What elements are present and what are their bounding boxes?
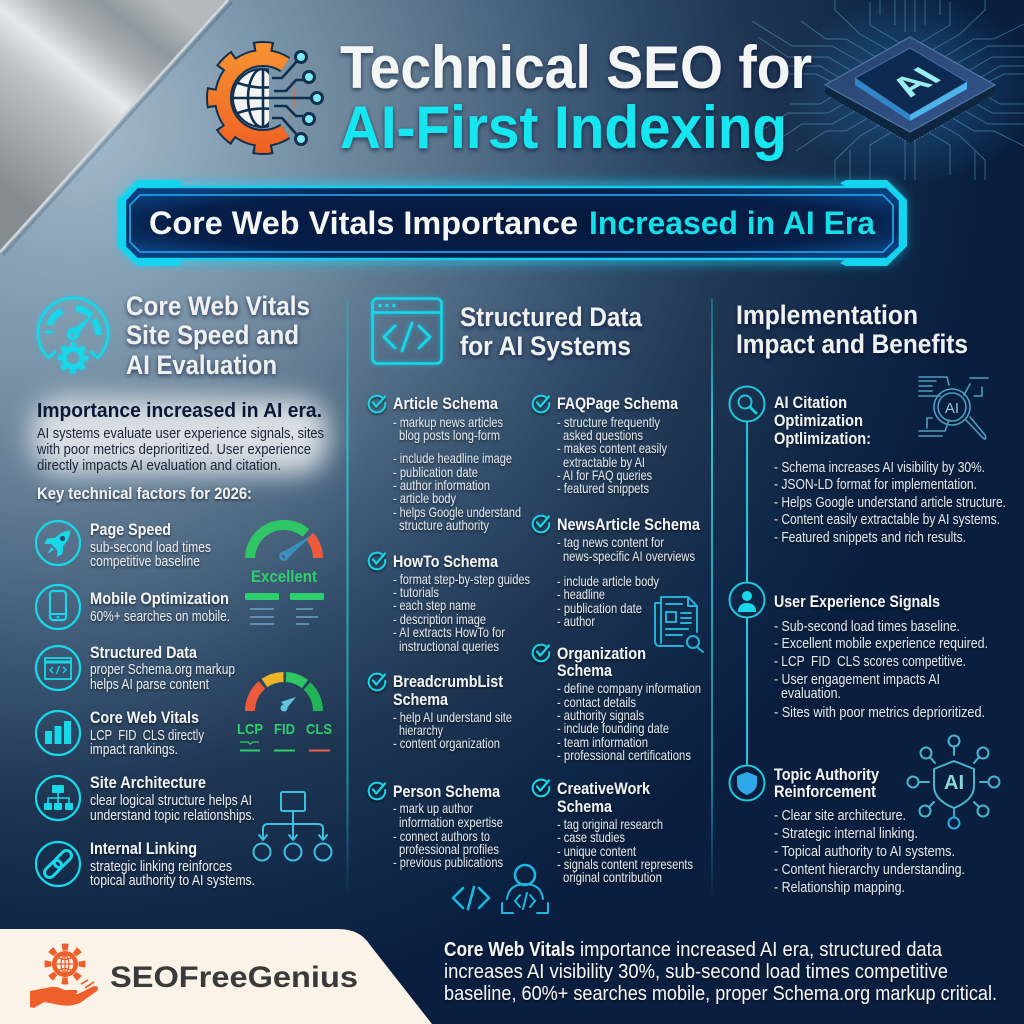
schema: organization: Organization: [557, 644, 646, 663]
panel: core web vitals: [32, 291, 332, 889]
schema: faqpage: FAQPage Schema: [557, 394, 678, 413]
AI chip illustration: [752, 0, 1024, 185]
schema: howto: - description image: [393, 611, 486, 627]
banner: Increased in AI Era: [589, 205, 875, 241]
schema: faqpage: - AI for FAQ queries: [557, 467, 652, 483]
footer: summary text: importance increased AI era, structured data: [580, 939, 943, 961]
footer: summary text: Core Web Vitals: [444, 939, 575, 961]
factor: core web vitals: Core Web Vitals: [90, 708, 199, 727]
schema: faqpage: - makes content easily: [557, 440, 667, 456]
schema: faqpage: asked questions: [563, 427, 643, 443]
benefit: user experience: - User engagement impacts AI: [774, 671, 940, 688]
panel: implementation: [730, 300, 1006, 896]
schema: person: - mark up author: [393, 800, 473, 816]
heading: implementation: Impact and Benefits: [736, 329, 968, 359]
factor: page speed: sub-second load times: [90, 540, 211, 556]
schema: breadcrumblist: [369, 672, 512, 751]
schema: howto: - each step name: [393, 597, 476, 613]
benefit: user experience: [774, 592, 988, 721]
benefit: ai citation: - JSON-LD format for implementation.: [774, 476, 977, 493]
chart: excellent gauge: [245, 525, 324, 624]
schema: article: - include headline image: [393, 450, 512, 466]
schema: newsarticle: news-specific AI overviews: [563, 548, 695, 564]
icon: browser code window: [372, 298, 442, 364]
factor: mobile optimization: Mobile Optimization: [90, 589, 229, 608]
icon: speedometer with gear: [38, 298, 108, 371]
icon: search: [730, 386, 764, 422]
benefit: user experience: - LCP FID CLS scores competitive.: [774, 653, 966, 670]
schema: newsarticle: - author: [557, 613, 595, 629]
schema: organization: - authority signals: [557, 707, 644, 723]
schema: howto: instructional queries: [399, 638, 499, 654]
factor: internal linking: Internal Linking: [90, 839, 197, 858]
icon: shield: [730, 766, 764, 800]
schema: person: - previous publications: [393, 854, 503, 870]
schema: howto: HowTo Schema: [393, 552, 498, 571]
icon: gear on hand logo: [30, 947, 98, 1008]
factor: structured data: proper Schema.org markup: [90, 662, 235, 678]
heading: structured data: Structured Data: [460, 302, 643, 332]
schema: person: Person Schema: [393, 782, 500, 801]
title: [340, 34, 812, 161]
title: Technical SEO for: [340, 34, 812, 101]
heading: implementation: [736, 300, 968, 359]
icon: ai magnifier: AI: [945, 400, 959, 417]
schema: organization: - professional certifications: [557, 747, 691, 763]
factor: structured data: [36, 643, 235, 693]
heading: structured data: for AI Systems: [460, 331, 631, 361]
footer: brand: [0, 929, 432, 1024]
footer: brand: SEOFreeGenius: [110, 961, 358, 994]
banner: Core Web Vitals Importance: [149, 205, 578, 241]
benefit: topic authority: [774, 765, 965, 896]
schema: howto: - format step-by-step guides: [393, 571, 530, 587]
chart: lcp fid cls gauge: FID: [274, 721, 295, 738]
schema: breadcrumblist: BreadcrumbList: [393, 672, 503, 691]
schema: organization: - contact details: [557, 694, 636, 710]
schema: howto: [369, 552, 530, 654]
schema: newsarticle: [533, 515, 700, 629]
factor: mobile optimization: 60%+ searches on mobile.: [90, 609, 230, 625]
schema: person: professional profiles: [399, 841, 499, 857]
callout: importance: with poor metrics deprioritized. User experience: [36, 442, 311, 458]
icon: ai magnifier: [919, 377, 988, 439]
schema: article: structure authority: [399, 517, 489, 533]
benefit: ai citation: - Featured snippets and rich results.: [774, 529, 966, 546]
schema: person: - connect authors to: [393, 828, 490, 844]
schema: creativework: Schema: [557, 797, 612, 816]
silver corner: [0, 0, 232, 255]
benefit: user experience: evaluation.: [781, 685, 841, 702]
benefit: ai citation: AI Citation: [774, 393, 847, 412]
schema: newsarticle: - headline: [557, 586, 605, 602]
icon: ai shield network: [908, 736, 1000, 828]
schema: howto: - tutorials: [393, 584, 439, 600]
schema: article: [369, 394, 521, 533]
schema: creativework: - unique content: [557, 843, 636, 859]
heading: core web vitals: [126, 291, 310, 380]
benefit: user experience: - Sub-second load times baseline.: [774, 618, 960, 635]
schema: creativework: [533, 779, 693, 885]
schema: article: blog posts long-form: [399, 427, 500, 443]
heading: core web vitals: Site Speed and: [126, 320, 299, 350]
schema: creativework: CreativeWork: [557, 779, 650, 798]
heading: implementation: Implementation: [736, 300, 918, 330]
factor: site architecture: [36, 773, 255, 824]
icon: user: [730, 582, 764, 618]
schema: organization: - team information: [557, 734, 648, 750]
benefit: topic authority: - Content hierarchy understanding.: [774, 861, 965, 878]
benefit: topic authority: - Clear site architecture.: [774, 807, 906, 824]
footer: summary text: increases AI visibility 30%, sub-second load times competitive: [444, 961, 948, 983]
schema: article: - helps Google understand: [393, 504, 521, 520]
benefit: ai citation: [774, 393, 1006, 546]
callout: importance: AI systems evaluate user experience signals, sites: [37, 426, 324, 442]
schema: breadcrumblist: - content organization: [393, 735, 500, 751]
benefit: user experience: - Sites with poor metrics deprioritized.: [774, 704, 985, 721]
factor: core web vitals: impact rankings.: [90, 742, 178, 758]
callout: importance: Importance increased in AI era.: [37, 400, 322, 422]
chart: excellent gauge: Excellent: [251, 567, 317, 586]
chart: lcp fid cls gauge: CLS: [306, 721, 332, 738]
heading: structured data: [460, 302, 643, 361]
icon: gear and globe logo: [213, 48, 322, 148]
schema: creativework: - signals content represents: [557, 856, 693, 872]
callout: importance: directly impacts AI evaluation and citation.: [37, 458, 281, 474]
schema: creativework: - case studies: [557, 829, 625, 845]
divider: [346, 298, 348, 898]
factor: internal linking: strategic linking reinforces: [90, 859, 232, 875]
factor: internal linking: topical authority to AI systems.: [90, 873, 255, 889]
schema: creativework: original contribution: [563, 869, 662, 885]
schema: article: - markup news articles: [393, 414, 503, 430]
schema: faqpage: [533, 394, 678, 496]
schema: newsarticle: - include article body: [557, 573, 659, 589]
benefit: topic authority: Reinforcement: [774, 782, 876, 801]
heading: core web vitals: AI Evaluation: [126, 350, 277, 380]
schema: article: - author information: [393, 477, 490, 493]
factor: structured data: Structured Data: [90, 643, 197, 662]
schema: article: - article body: [393, 490, 456, 506]
banner: [117, 180, 907, 266]
benefit: topic authority: - Strategic internal linking.: [774, 825, 918, 842]
schema: organization: Schema: [557, 661, 612, 680]
factor: page speed: Page Speed: [90, 520, 171, 539]
schema: creativework: - tag original research: [557, 816, 663, 832]
schema: person: [369, 782, 503, 870]
schema: breadcrumblist: - help AI understand site: [393, 709, 512, 725]
callout: importance: [32, 398, 328, 474]
factor: mobile optimization: [36, 585, 230, 629]
title: AI-First Indexing: [340, 94, 787, 161]
benefit: ai citation: Optlimization:: [774, 429, 871, 448]
heading: core web vitals: Core Web Vitals: [126, 291, 310, 321]
factor: site architecture: understand topic relationships.: [90, 808, 255, 824]
benefit: ai citation: Optimization: [774, 411, 863, 430]
schema: newsarticle: - publication date: [557, 600, 642, 616]
schema: newsarticle: - tag news content for: [557, 534, 664, 550]
benefit: topic authority: Topic Authority: [774, 765, 879, 784]
subheading: key factors: Key technical factors for 2026:: [37, 484, 252, 503]
footer: summary text: [444, 939, 997, 1005]
schema: newsarticle: NewsArticle Schema: [557, 515, 700, 534]
benefit: user experience: User Experience Signals: [774, 592, 940, 611]
factor: internal linking: [36, 839, 255, 889]
schema: person: information expertise: [399, 814, 503, 830]
factor: core web vitals: LCP FID CLS directly: [90, 728, 205, 744]
schema: breadcrumblist: Schema: [393, 690, 448, 709]
schema: organization: - define company information: [557, 680, 701, 696]
chart: lcp fid cls gauge: LCP: [237, 721, 263, 738]
benefit: topic authority: - Topical authority to AI systems.: [774, 843, 955, 860]
icon: ai shield network: AI: [944, 772, 964, 794]
chart: lcp fid cls gauge: [237, 677, 332, 750]
benefit: topic authority: - Relationship mapping.: [774, 879, 905, 896]
panel: structured data: [369, 298, 703, 913]
schema: article: - publication date: [393, 464, 478, 480]
schema: faqpage: - structure frequently: [557, 414, 660, 430]
factor: page speed: [36, 520, 211, 570]
factor: structured data: helps AI parse content: [90, 677, 209, 693]
schema: organization: [533, 644, 701, 763]
factor: site architecture: Site Architecture: [90, 773, 206, 792]
schema: faqpage: - featured snippets: [557, 480, 649, 496]
diagram: site hierarchy: [254, 792, 332, 860]
factor: core web vitals: [36, 708, 205, 758]
AI chip illustration: AI: [881, 62, 951, 102]
factor: site architecture: clear logical structure helps AI: [90, 793, 252, 809]
schema: howto: - AI extracts HowTo for: [393, 624, 505, 640]
schema: breadcrumblist: hierarchy: [399, 722, 443, 738]
schema: organization: - include founding date: [557, 720, 669, 736]
icon: code and person: [453, 865, 548, 913]
icon: newspaper with magnifier: [655, 597, 703, 652]
schema: article: Article Schema: [393, 394, 498, 413]
schema: faqpage: extractable by AI: [563, 454, 645, 470]
factor: page speed: competitive baseline: [90, 554, 200, 570]
timeline: [730, 386, 764, 800]
